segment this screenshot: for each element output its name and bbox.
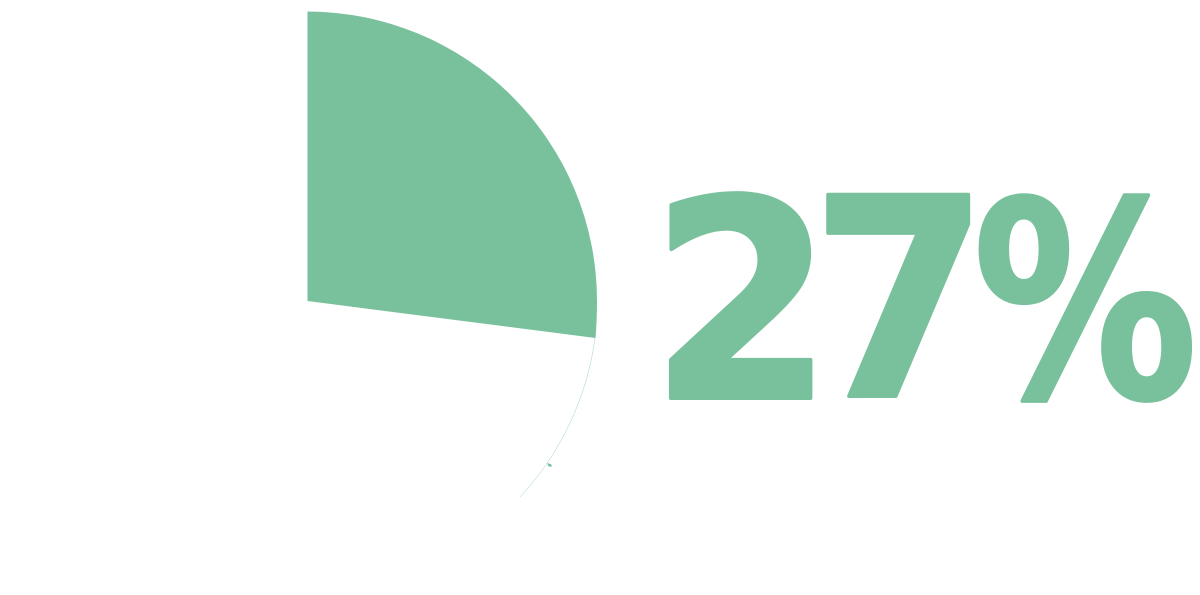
pie chart: 27 percent (308, 12, 597, 497)
percentage value (650, 140, 1198, 463)
percentage value: 7 (811, 140, 989, 461)
percentage value: % (973, 145, 1198, 461)
pie slice: 27 percent highlighted (308, 12, 597, 338)
small speck on pie edge (548, 463, 552, 467)
percentage value: 2 (650, 142, 833, 463)
pie remainder hairline edge (520, 338, 595, 497)
